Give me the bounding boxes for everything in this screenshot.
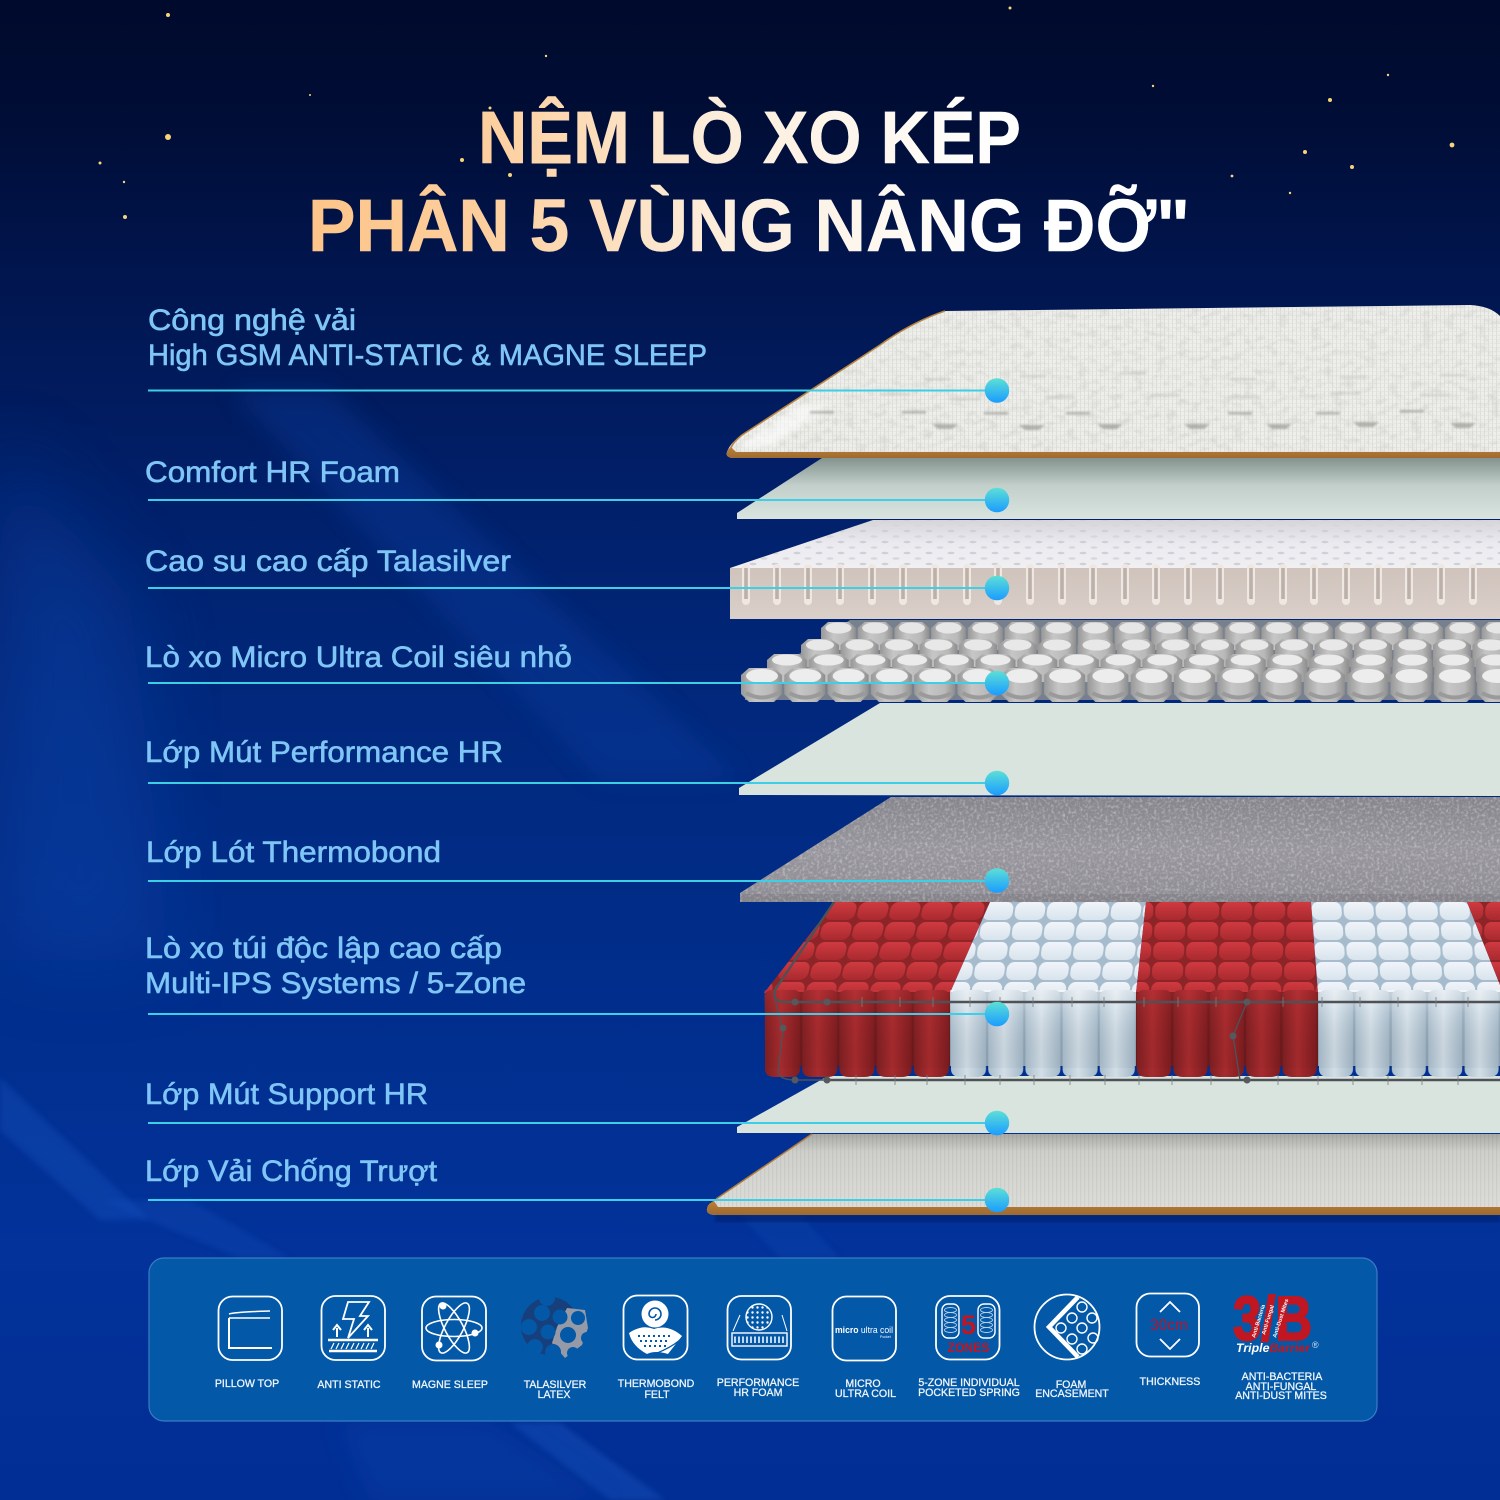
layer: pocket spring unit: [764, 902, 1500, 1085]
feature: thickness: 30cm: [1150, 1317, 1188, 1334]
feature: micro ultra coil: Pocket: [880, 1335, 891, 1339]
callout: Lớp Mút Support HR: [145, 1078, 1009, 1135]
feature: micro ultra coil: [832, 1296, 896, 1400]
feature: triple barrier: TripleBarrier: [1236, 1343, 1311, 1355]
feature: foam encasement: [1034, 1294, 1109, 1400]
callout: Công nghệ vải: [148, 304, 1009, 403]
callout: Comfort HR Foam: [145, 456, 1009, 512]
feature: magne sleep: MAGNE SLEEP: [412, 1379, 488, 1391]
feature: foam encasement: FOAM: [1056, 1379, 1086, 1391]
callout: Lớp Vải Chống Trượt: [145, 1155, 1009, 1212]
feature: micro ultra coil: MICRO: [845, 1378, 881, 1390]
layer: top quilted fabric: [727, 305, 1500, 458]
feature: 5-zone pocketed spring: [918, 1296, 1020, 1399]
callout: Lò xo Micro Ultra Coil: [145, 641, 1009, 695]
feature: triple barrier: ANTI-FUNGAL: [1246, 1381, 1316, 1393]
feature: triple barrier: ®: [1312, 1340, 1319, 1350]
layer: Talasilver latex: [730, 520, 1500, 619]
feature: talasilver latex: TALASILVER: [524, 1379, 587, 1391]
feature: talasilver latex: [514, 1290, 593, 1401]
callout: Cao su cao cấp Talasilver: Cao su cao cấp Talasilver: [145, 545, 511, 578]
feature: 5-zone pocketed spring: 5-ZONE INDIVIDUAL: [918, 1377, 1020, 1389]
callout: Lò xo Micro Ultra Coil: Lò xo Micro Ultra Coil siêu nhỏ: [145, 641, 572, 674]
callout: Comfort HR Foam: Comfort HR Foam: [145, 456, 400, 489]
feature: triple barrier: Anti-Fungal: [1261, 1304, 1276, 1336]
feature: pillow top: PILLOW TOP: [215, 1378, 279, 1390]
feature: triple barrier: ANTI-DUST MITES: [1235, 1390, 1327, 1402]
spring zone tops: [764, 902, 1500, 993]
spring zone fronts: [764, 990, 1500, 1078]
feature: triple barrier: [1233, 1285, 1327, 1402]
callout: Lò xo túi độc lập: Lò xo túi độc lập cao cấp: [145, 932, 502, 965]
feature: pillow top: [215, 1296, 282, 1390]
callout: Lớp Lót Thermobond: [146, 836, 1009, 893]
callout: Lớp Lót Thermobond: Lớp Lót Thermobond: [146, 836, 441, 869]
feature: 5-zone pocketed spring: POCKETED SPRING: [918, 1387, 1020, 1399]
feature: micro ultra coil: ULTRA COIL: [835, 1388, 896, 1400]
title: [308, 96, 1190, 267]
feature: triple barrier: 3/B: [1233, 1285, 1312, 1354]
feature: thickness: [1136, 1294, 1200, 1388]
feature: micro ultra coil: micro ultra coil: [835, 1325, 893, 1336]
feature: performance HR foam: HR FOAM: [734, 1387, 782, 1399]
feature: thermobond felt: THERMOBOND: [618, 1378, 695, 1390]
feature: thickness: THICKNESS: [1140, 1376, 1200, 1388]
layer: bottom anti-slip fabric: [707, 1134, 1500, 1222]
feature: performance HR foam: PERFORMANCE: [717, 1377, 799, 1389]
frame wires: [774, 902, 1500, 1085]
layer: comfort HR foam: [737, 458, 1500, 519]
feature: anti static: [317, 1296, 385, 1391]
feature: thermobond felt: [618, 1296, 695, 1401]
callout: Lớp Vải Chống Trượt: Lớp Vải Chống Trượt: [145, 1155, 438, 1188]
feature: thermobond felt: FELT: [644, 1389, 670, 1401]
callout: Công nghệ vải: Công nghệ vải: [148, 304, 356, 337]
callout: Công nghệ vải: High GSM ANTI-STATIC & MAGNE SLEEP: [148, 339, 707, 372]
feature: foam encasement: ENCASEMENT: [1035, 1388, 1109, 1400]
feature: triple barrier: ANTI-BACTERIA: [1242, 1371, 1323, 1383]
feature: performance HR foam: [717, 1296, 799, 1399]
layer: thermobond felt: [740, 797, 1500, 902]
stars: [98, 6, 1454, 219]
callout: Lớp Mút Support HR: Lớp Mút Support HR: [145, 1078, 428, 1111]
feature: 5-zone pocketed spring: 5: [961, 1310, 976, 1340]
callout: Lớp Mút Performance HR: [145, 736, 1009, 795]
callout: Lò xo túi độc lập: Multi-IPS Systems / 5-Zone: [145, 967, 526, 1000]
layer: support HR foam: [737, 1076, 1500, 1133]
callout: Lò xo túi độc lập: [145, 932, 1009, 1026]
callout: Cao su cao cấp Talasilver: [145, 545, 1009, 600]
feature: anti static: ANTI STATIC: [317, 1379, 381, 1391]
feature: triple barrier: Anti-Dust Mites: [1272, 1298, 1290, 1339]
panel: features: [149, 1258, 1377, 1421]
layer: performance HR foam: [739, 703, 1500, 796]
layer: micro ultra coil: [740, 620, 1500, 703]
feature: triple barrier: Anti-Bacteria: [1251, 1303, 1267, 1339]
feature: 5-zone pocketed spring: ZONES: [948, 1340, 990, 1355]
callout: Lớp Mút Performance HR: Lớp Mút Performance HR: [145, 736, 503, 769]
title: PHÂN 5 VÙNG NÂNG ĐỠ": [308, 184, 1190, 267]
title: NỆM LÒ XO KÉP: [478, 96, 1021, 179]
feature: talasilver latex: LATEX: [538, 1389, 570, 1401]
feature: magne sleep: [412, 1296, 488, 1391]
